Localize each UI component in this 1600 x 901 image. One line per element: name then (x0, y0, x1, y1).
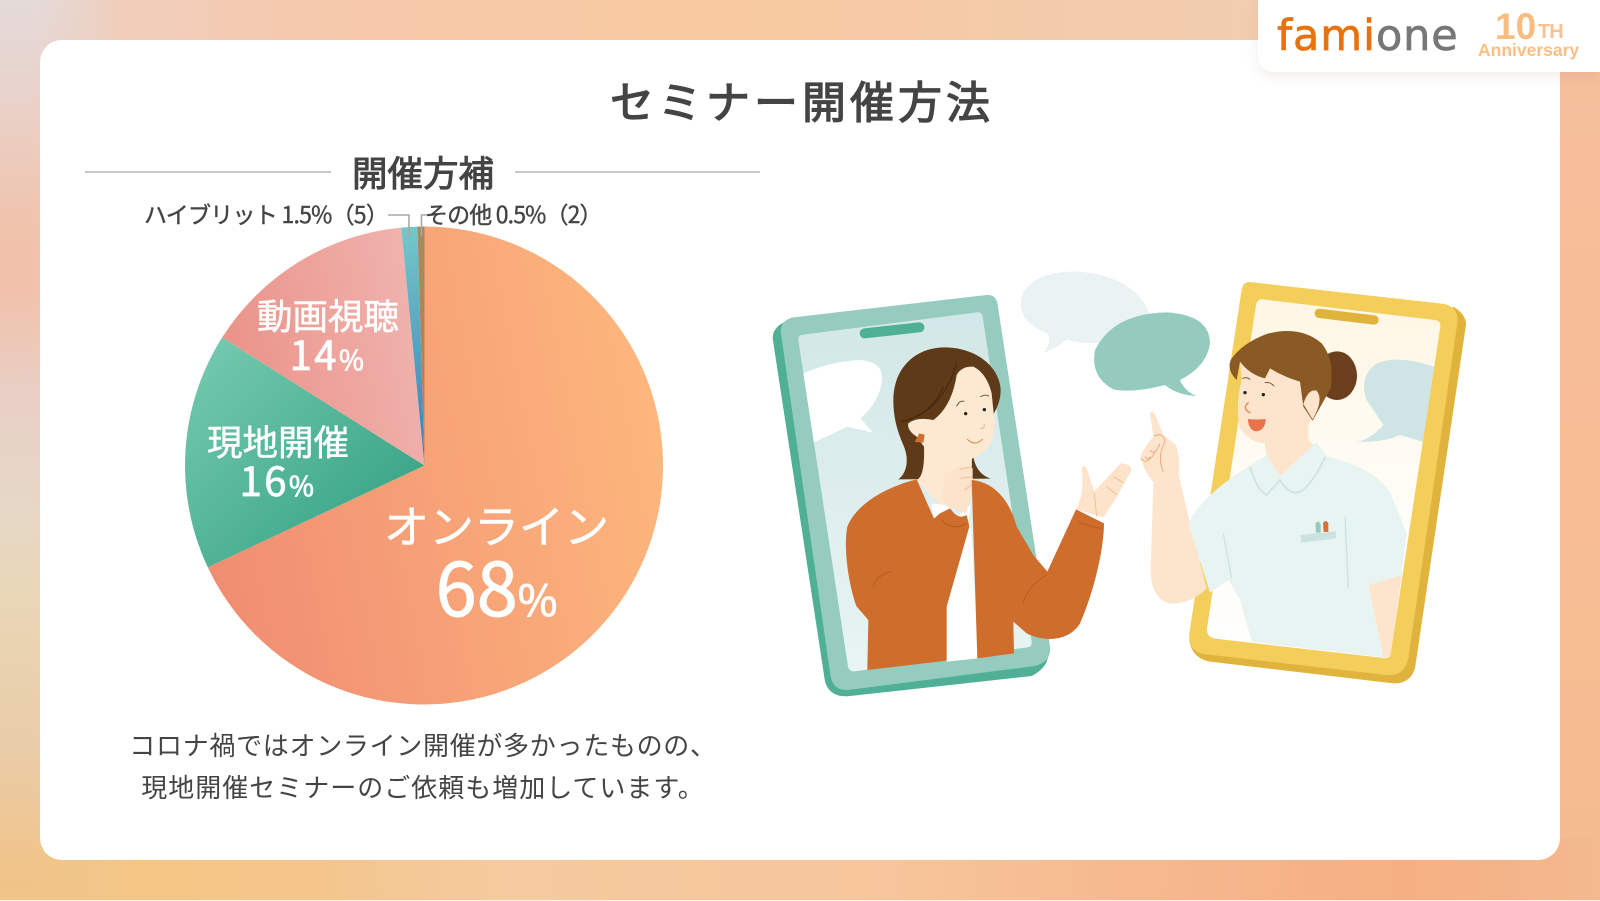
hair strands (902, 363, 957, 422)
collar stitching (1250, 457, 1325, 495)
label: on-site 16% (207, 415, 349, 508)
label: video viewing 14% (257, 289, 399, 382)
10th anniversary mark: 10 (1495, 6, 1536, 47)
slice: hybrid 1.5% (401, 227, 424, 466)
ear (1303, 390, 1320, 419)
speech bubble in screen (1357, 360, 1434, 442)
label: on-site 16%: 現地開催 (207, 415, 349, 466)
eyebrows and nose (1243, 378, 1274, 413)
phone screen (1207, 299, 1440, 658)
cardigan left (846, 479, 969, 670)
neck (1263, 417, 1327, 478)
hand at chin (943, 466, 973, 513)
eyes (964, 408, 986, 415)
phone screen (798, 312, 1032, 671)
eyebrows, nose and smile (957, 395, 989, 443)
slice: on-site 16% (185, 337, 424, 567)
caption text: コロナ禍ではオンライン開催が多かったものの、 (129, 726, 717, 763)
palm lines (1094, 477, 1123, 517)
logo wordmark: famione (1277, 11, 1459, 61)
bare upper arm (1368, 575, 1402, 657)
phone speaker notch (1319, 313, 1374, 320)
label: online 68%: 68% (436, 531, 557, 638)
label: online 68% (384, 491, 609, 638)
face and neck (908, 367, 995, 508)
white inner shirt (947, 520, 978, 662)
phone body (781, 295, 1050, 690)
label: other: その他 0.5%（2） (425, 196, 602, 230)
hair bun (1317, 351, 1357, 400)
open hand (1076, 463, 1131, 517)
10th anniversary mark: Anniversary (1478, 40, 1579, 60)
10th anniversary mark: TH (1538, 21, 1563, 43)
mouth (1248, 419, 1266, 431)
nurse uniform (1188, 442, 1407, 657)
pie chart (185, 214, 1466, 704)
illustration: woman in smartphone (773, 295, 1131, 696)
face (1238, 360, 1318, 443)
cardigan folds (873, 520, 1102, 603)
teal speech bubble (1094, 312, 1210, 396)
label: video viewing 14%: 14% (290, 324, 366, 382)
slice: other 0.5% (417, 226, 424, 466)
bare forearm (1151, 473, 1207, 603)
cardigan right and sleeve (972, 480, 1104, 658)
back hair (893, 347, 1001, 479)
finger lines (1141, 435, 1165, 472)
heading text: 開催方補 (352, 146, 494, 197)
hair (1230, 331, 1332, 421)
finger lines (960, 467, 972, 490)
pen teal (1315, 522, 1321, 533)
label: hybrid: ハイブリット 1.5%（5） (144, 196, 388, 230)
phone body (1189, 282, 1458, 675)
phone speaker notch (865, 327, 919, 333)
speech bubble in screen (797, 360, 882, 444)
pen orange (1323, 521, 1328, 532)
illustration: nurse in smartphone (1094, 282, 1466, 683)
leader line: hybrid (388, 215, 409, 236)
uniform sleeve seams (1223, 517, 1348, 588)
label: online 68%: オンライン (384, 491, 609, 556)
pointing hand (1141, 411, 1179, 484)
caption text (129, 726, 717, 805)
phone body shadow edge (773, 323, 1048, 696)
phone side edge (1189, 307, 1466, 683)
label: on-site 16%: 16% (240, 450, 316, 508)
pale speech bubble (1021, 272, 1150, 353)
breast pocket (1301, 531, 1336, 543)
earring (915, 433, 925, 443)
slice: online 68% (208, 226, 663, 704)
caption text: 現地開催セミナーのご依頼も増加しています。 (141, 768, 705, 805)
label: video viewing 14%: 動画視聴 (257, 289, 399, 340)
10th anniversary mark (1478, 6, 1579, 60)
eyes (1243, 391, 1265, 396)
leader line: other (422, 215, 434, 236)
logo badge: famione 10th anniversary (1258, 0, 1600, 72)
slice: video 14% (222, 228, 424, 466)
title: セミナー開催方法 (610, 67, 994, 131)
collar (932, 503, 971, 523)
